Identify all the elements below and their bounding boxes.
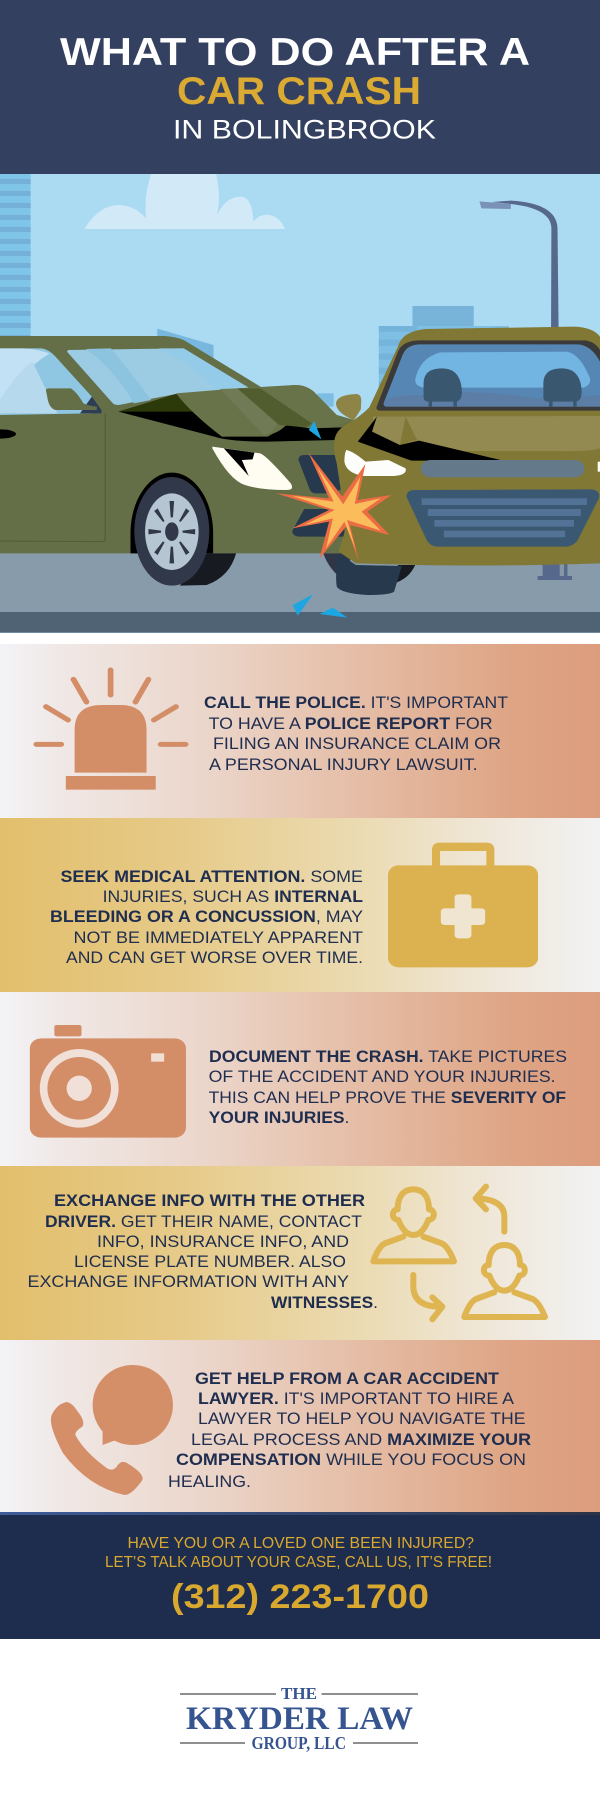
text: call the police: FILING AN INSURANCE CLAIM OR [213,734,501,753]
cta text: HAVE YOU OR A LOVED ONE BEEN INJURED? [128,1535,474,1552]
text: exchange info: DRIVER. GET THEIR NAME, CONTACT [45,1212,362,1231]
text: exchange info: LICENSE PLATE NUMBER. ALSO [74,1252,346,1271]
explosion [276,453,391,562]
text: exchange info [28,1191,378,1312]
text: get help: LEGAL PROCESS AND MAXIMIZE YOUR [191,1430,531,1449]
text: get help [168,1369,531,1491]
title line 2: CAR CRASH [177,70,421,113]
text: seek medical attention: AND CAN GET WORSE OVER TIME. [66,948,363,967]
icon: first aid kit [388,843,538,967]
text: get help: LAWYER TO HELP YOU NAVIGATE THE [198,1409,526,1428]
logo: The Kryder Law Group: GROUP, LLC [252,1733,346,1753]
text: get help: COMPENSATION WHILE YOU FOCUS ON [176,1450,526,1469]
debris shards [293,421,347,618]
logo: The Kryder Law Group: THE [281,1684,317,1703]
headlight [212,447,292,490]
sky elements [0,174,559,351]
text: seek medical attention [50,867,363,967]
text: get help: GET HELP FROM A CAR ACCIDENT [195,1369,500,1388]
text: seek medical attention: INJURIES, SUCH AS INTERNAL [103,887,363,906]
panel: document the crash [0,992,600,1166]
logo: The Kryder Law Group: KRYDER LAW [186,1701,413,1737]
text: document the crash: YOUR INJURIES. [209,1108,349,1127]
text: seek medical attention: SEEK MEDICAL ATTENTION. SOME [60,867,363,886]
text: call the police: TO HAVE A POLICE REPORT FOR [209,714,493,733]
grille [298,455,346,493]
illustration: car crash scene [0,174,600,633]
title line 3: IN BOLINGBROOK [173,114,436,144]
road and background buildings [0,326,600,633]
panel: get help from a lawyer [0,1340,600,1512]
panel: call the police [0,644,600,818]
text: call the police: CALL THE POLICE. IT'S IMPORTANT [204,693,508,712]
text: exchange info: EXCHANGE INFO WITH THE OTHER [54,1191,365,1210]
cta text line 2: LET’S TALK ABOUT YOUR CASE, CALL US, IT’S FREE! [105,1554,492,1571]
call to action band [0,1512,600,1639]
text: call the police [204,693,508,774]
text: document the crash [209,1047,567,1127]
text: document the crash: DOCUMENT THE CRASH. TAKE PICTURES [209,1047,567,1066]
text: exchange info: WITNESSES. [271,1293,378,1312]
panel: seek medical attention [0,818,600,992]
text: call the police: A PERSONAL INJURY LAWSUIT. [209,755,478,774]
crumpled hood [119,394,344,442]
text: document the crash: THIS CAN HELP PROVE THE SEVERITY OF [209,1088,566,1107]
text: exchange info: EXCHANGE INFORMATION WITH ANY [28,1272,349,1291]
title banner [0,0,600,174]
text: document the crash: OF THE ACCIDENT AND YOUR INJURIES. [209,1067,556,1086]
icon: siren [36,670,186,790]
phone number: (312) 223-1700 [171,1578,429,1616]
title line 1: WHAT TO DO AFTER A [60,31,530,74]
text: seek medical attention: NOT BE IMMEDIATELY APPARENT [74,928,363,947]
icon: two people exchanging [373,1187,545,1319]
right car [323,327,600,595]
text: get help: LAWYER. IT'S IMPORTANT TO HIRE A [198,1389,515,1408]
text: seek medical attention: BLEEDING OR A CONCUSSION , MAY [50,907,363,926]
text: exchange info: INFO, INSURANCE INFO, AND [97,1232,349,1251]
panel: exchange info [0,1166,600,1340]
logo: The Kryder Law Group [180,1684,418,1753]
left car [0,336,354,586]
text: get help: HEALING. [168,1472,251,1491]
wheel [130,473,213,553]
icon: phone with speech bubble [51,1365,173,1495]
icon: camera [30,1025,186,1138]
